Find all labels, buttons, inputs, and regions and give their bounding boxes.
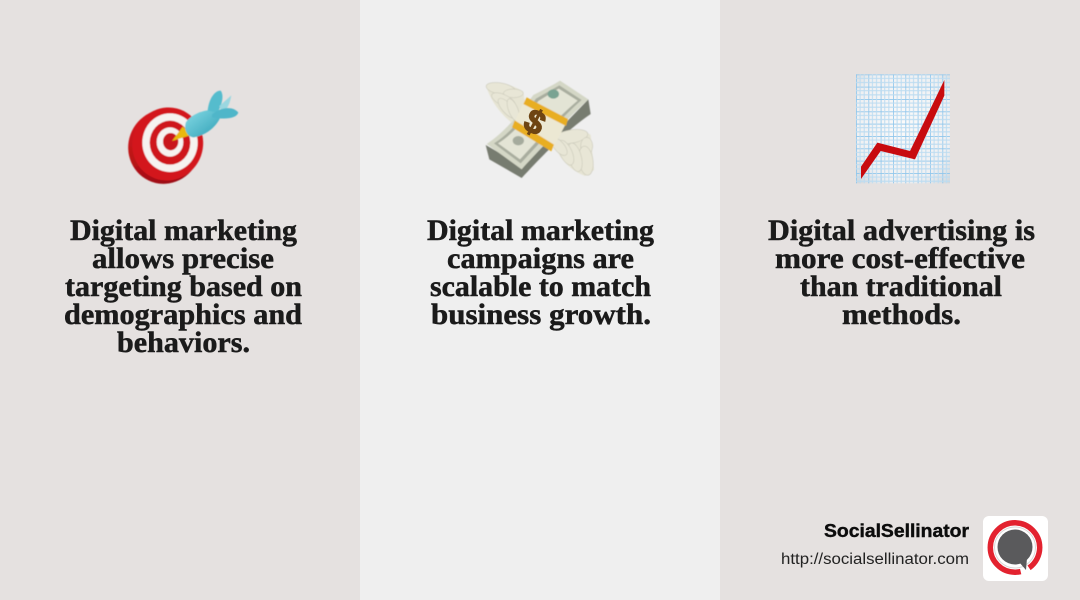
heading: scalability benefit bbox=[427, 214, 654, 331]
heading: targeting benefit bbox=[64, 214, 302, 359]
heading: scalability benefit: business growth. bbox=[431, 298, 651, 331]
brand block bbox=[781, 516, 1048, 581]
brand name and url bbox=[781, 521, 969, 568]
brand name and url: http://socialsellinator.com bbox=[781, 551, 969, 568]
heading: scalability benefit: scalable to match bbox=[430, 270, 651, 303]
dollar sign: $ bbox=[518, 102, 552, 144]
panel: precise targeting bbox=[0, 0, 360, 600]
heading: cost benefit bbox=[768, 214, 1035, 331]
heading: targeting benefit: behaviors. bbox=[117, 326, 250, 359]
heading: scalability benefit: Digital marketing bbox=[427, 214, 654, 247]
heading: cost benefit: methods. bbox=[842, 298, 961, 331]
panel: cost effectiveness bbox=[720, 0, 1080, 600]
heading: targeting benefit: demographics and bbox=[64, 298, 302, 331]
heading: targeting benefit: allows precise bbox=[92, 242, 274, 275]
icon: money with wings bbox=[485, 80, 594, 178]
brand name and url: SocialSellinator bbox=[824, 521, 969, 541]
icon: chart increasing bbox=[856, 74, 950, 184]
logo bbox=[983, 516, 1048, 581]
heading: cost benefit: Digital advertising is bbox=[768, 214, 1035, 247]
heading: scalability benefit: campaigns are bbox=[447, 242, 634, 275]
panel: scalable campaigns bbox=[360, 0, 720, 600]
heading: targeting benefit: targeting based on bbox=[65, 270, 302, 303]
icon: dart hitting target bbox=[127, 90, 239, 185]
heading: cost benefit: more cost-effective bbox=[775, 242, 1025, 275]
heading: targeting benefit: Digital marketing bbox=[70, 214, 297, 247]
heading: cost benefit: than traditional bbox=[800, 270, 1002, 303]
